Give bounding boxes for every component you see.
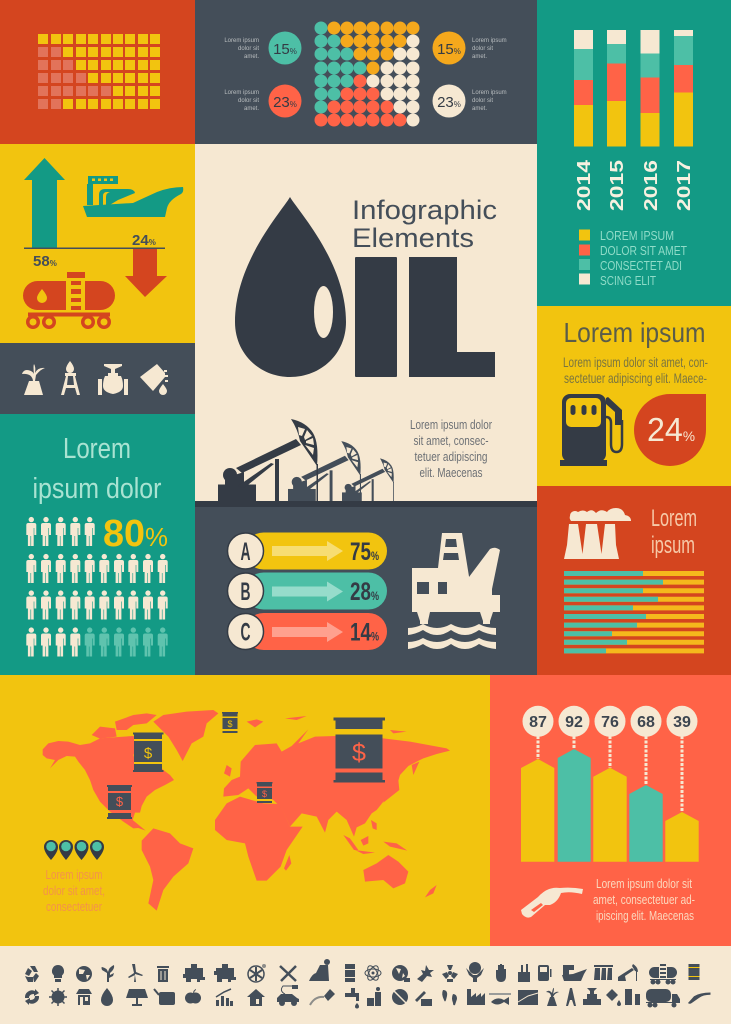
icon: pipeline valve: [98, 364, 128, 395]
icon: ship: [562, 965, 587, 981]
icon: puzzle piece: [183, 964, 205, 982]
icon: axe and stump: [415, 991, 432, 1006]
paragraph: yellow panel: [563, 354, 708, 386]
panel: dark icon strip: [0, 343, 195, 414]
horizontal stacked bars: [564, 571, 704, 653]
icon: offshore oil rig: [408, 533, 500, 649]
caption: top-left stat: dolor sit: [238, 46, 259, 52]
centre paragraph: elit. Maecenas: [420, 465, 483, 480]
caption: bottom-right stat: dolor sit: [472, 98, 493, 104]
icon: nozzle: [688, 992, 710, 1004]
icon: gusher: [546, 988, 559, 1006]
pump jacks: [218, 419, 394, 502]
barrel: Arctic: [222, 712, 238, 733]
year labels: [574, 160, 694, 211]
icon: no-globe: [392, 989, 408, 1005]
icon: rail tank car: [23, 272, 115, 329]
caption: top-right stat: Lorem ipsum: [472, 38, 507, 44]
heading: Lorem ipsum (red panel): ipsum: [651, 532, 695, 559]
icon: radiation person: [442, 965, 458, 982]
label: 24%: 24%: [132, 232, 156, 249]
icon: fuel pump: [560, 394, 622, 466]
icon: factory towers: [594, 965, 613, 980]
option bar A: [228, 532, 387, 570]
stat: 23% coral: [268, 84, 302, 118]
panel: chart coral: [490, 675, 731, 946]
Iceland and UK: [224, 719, 263, 777]
icon: globe with tag: [392, 965, 410, 982]
panel: centre dark: [195, 502, 537, 675]
year labels: 2016: [641, 160, 661, 211]
stat: 15% orange: 15%: [437, 41, 461, 58]
Arctic islands: [285, 716, 407, 733]
icon: power plant cooling towers: [564, 508, 631, 559]
stat: 23% cream: 23%: [437, 94, 461, 111]
South America: [142, 828, 193, 911]
barrel: large, Russia: [334, 718, 385, 782]
icon: hand: [496, 964, 506, 982]
Australia: [363, 855, 408, 888]
drop badge: 24%: [634, 394, 706, 466]
arrow-topped bar chart: 92: [565, 714, 583, 731]
icon: oil can: [154, 989, 175, 1005]
option bar C: [228, 613, 387, 650]
legend: LOREM IPSUM: [600, 228, 674, 243]
icon: footprints: [442, 990, 457, 1005]
icon: oil gusher: [22, 364, 45, 395]
coral paragraph: [593, 876, 695, 923]
arrow-topped bar chart: 87: [529, 714, 547, 731]
icon: sun: [49, 988, 67, 1006]
dot matrix chart: [314, 22, 420, 126]
legend: DOLOR SIT AMET: [600, 243, 687, 258]
icon: bulb: [52, 965, 64, 982]
icon: solar panel: [126, 989, 148, 1006]
icon: oil barrel: [688, 964, 700, 980]
heading: Lorem ipsum dolor: [32, 433, 162, 505]
people pictogram: [26, 517, 168, 656]
arrow-topped bar chart: 39: [673, 714, 691, 731]
Africa: [215, 797, 303, 881]
option bar B: 28%: [350, 578, 379, 606]
centre paragraph: tetuer adipiscing: [414, 449, 488, 464]
barrel: Canada: $: [144, 745, 153, 762]
baseline: [24, 248, 165, 249]
option bar B: [228, 572, 387, 610]
year labels: 2017: [674, 160, 694, 211]
legend: [579, 228, 687, 288]
icon: puzzle piece with leaf: [214, 964, 236, 982]
barrel: Mediterranean: [256, 782, 272, 803]
arrow-topped bar chart: [521, 706, 699, 862]
caption: bottom-left stat: Lorem ipsum: [224, 90, 259, 96]
caption: top-right stat: amet.: [472, 54, 487, 60]
Greenland: [153, 710, 218, 761]
caption: bottom-right stat: amet.: [472, 106, 487, 112]
Japan: [383, 762, 419, 803]
stat: 23% coral: 23%: [273, 94, 297, 111]
icon: apple: [185, 989, 201, 1004]
panel: top-centre dark: [195, 0, 537, 144]
icon: tank car: [649, 964, 677, 984]
footer icons: bottom row: [25, 985, 711, 1008]
heading: Lorem ipsum (red panel): [651, 505, 697, 559]
icon: factory: [467, 989, 485, 1005]
heading: Lorem ipsum (yellow panel): Lorem ipsum: [564, 317, 706, 348]
icon: tanker ship: [83, 176, 183, 217]
icon: wind turbine: [128, 964, 143, 982]
legend: SCING ELIT: [600, 273, 656, 288]
option bar A: A: [240, 538, 250, 566]
icon strip: [22, 361, 168, 395]
icon: toxic barrel: [345, 964, 355, 982]
year labels: 2015: [607, 160, 627, 211]
coral paragraph: ipiscing elit. Maecenas: [596, 908, 694, 923]
Eurasia: [223, 729, 450, 837]
stat: 15% teal: [268, 32, 302, 64]
heading: Lorem ipsum (red panel): Lorem: [651, 505, 697, 532]
icon: electric car: [277, 985, 299, 1006]
centre paragraph: [410, 417, 493, 480]
icon: refresh: [25, 989, 39, 1005]
ground band: [195, 501, 537, 507]
barrel: Canada: [133, 732, 164, 772]
centre paragraph: sit amet, consec-: [414, 433, 488, 448]
option bar C: C: [240, 618, 250, 646]
year labels: 2014: [574, 160, 594, 211]
icon: tanker truck: [646, 989, 680, 1008]
Indonesia and Philippines: [343, 820, 407, 854]
label: 58%: 58%: [33, 253, 57, 270]
panel: icon footer: [0, 946, 731, 1024]
drop badge: 24%: 24%: [647, 411, 695, 448]
coral paragraph: amet, consectetuer ad-: [593, 892, 695, 907]
coral paragraph: Lorem ipsum dolor sit: [596, 876, 692, 891]
stat: 23% cream: [432, 84, 466, 118]
barrel: Arctic: $: [227, 719, 233, 729]
icon: gas pump: [538, 965, 552, 981]
icon: trash can: [157, 966, 169, 982]
caption: bottom-left stat: dolor sit: [238, 98, 259, 104]
panel: left yellow: [0, 144, 195, 343]
stat: 15% orange: [432, 32, 466, 64]
map caption: Lorem ipsum: [46, 867, 102, 882]
icon: growth chart: [216, 989, 233, 1006]
icon: globe: [76, 966, 92, 982]
icon: water drop: [101, 988, 113, 1006]
Arctic Canada: [92, 713, 157, 739]
icon: pump jack: [618, 964, 638, 981]
icon: flower: [417, 965, 434, 982]
map caption: consectetuer: [46, 899, 103, 914]
icon: fuel nozzle: [521, 888, 583, 918]
panel: right teal: [537, 0, 731, 306]
caption: bottom-right stat: Lorem ipsum: [472, 90, 507, 96]
caption: top-left stat: Lorem ipsum: [224, 38, 259, 44]
centre paragraph: Lorem ipsum dolor: [410, 417, 493, 432]
barrel: Mediterranean: $: [262, 789, 267, 799]
heading: Lorem ipsum dolor: ipsum dolor: [32, 473, 162, 505]
icon: gas flare: [61, 361, 80, 395]
footer icons: top row: [25, 959, 700, 984]
icon: canister: [606, 989, 621, 1006]
panel: right red: [537, 486, 731, 675]
arrow: down red: [125, 249, 167, 297]
stat: 80%: 80%: [103, 513, 168, 555]
legend: CONSECTET ADI: [600, 258, 682, 273]
icon: fuel pumps: [625, 989, 640, 1005]
panel: map yellow: [0, 675, 490, 946]
icon: fan wheel: [248, 964, 266, 982]
caption: bottom-left stat: amet.: [244, 106, 259, 112]
world map: [43, 710, 450, 911]
barrel: Mexico: $: [116, 794, 124, 809]
title: Elements: [352, 223, 474, 253]
icon: eco house: [247, 989, 265, 1006]
panel: left teal: [0, 414, 195, 675]
barrel: large, Russia: $: [352, 739, 366, 767]
icon: dead fish: [489, 993, 511, 1005]
location pins: [44, 840, 104, 860]
waffle square chart: [38, 34, 160, 109]
icon: valve: [583, 988, 601, 1005]
icon: hands with globe: [466, 962, 484, 982]
arrow-topped bar chart: 68: [637, 714, 655, 731]
icon: nuclear plant: [309, 959, 330, 981]
title: [352, 195, 497, 253]
panel: centre cream: [195, 144, 537, 502]
icon: house: [76, 989, 92, 1005]
map caption: [43, 867, 105, 914]
caption: top-left stat: amet.: [244, 54, 259, 60]
panel: right yellow: [537, 306, 731, 486]
icon: pipeline chart: [518, 990, 538, 1005]
title: Infographic: [352, 195, 497, 225]
icon: tap: [345, 988, 359, 1008]
icon: person with bin: [367, 987, 381, 1006]
icon: oil drop: [235, 197, 346, 377]
icon: recycle: [25, 966, 39, 982]
heading: Lorem ipsum dolor: Lorem: [63, 433, 131, 465]
option bar B: B: [240, 578, 250, 606]
option bar C: 14%: [350, 618, 379, 646]
icon: plant: [102, 965, 114, 982]
title letters: IL: [355, 257, 495, 377]
caption: top-right stat: dolor sit: [472, 46, 493, 52]
arrow-topped bar chart: 76: [601, 714, 619, 731]
stacked bar chart: [574, 30, 693, 146]
icon: oil canister: [140, 364, 168, 395]
icon: watering hose: [310, 989, 335, 1005]
icon: refinery: [518, 964, 530, 982]
barrel: Mexico: [107, 785, 132, 819]
map caption: dolor sit amet,: [43, 883, 105, 898]
icon: derrick: [566, 988, 576, 1006]
arrow: up teal: [24, 158, 65, 248]
option bar A: 75%: [350, 538, 379, 566]
icon: tools: [280, 966, 296, 981]
panel: top-left red: [0, 0, 195, 144]
stat: 15% teal: 15%: [273, 41, 297, 58]
North America: [43, 736, 174, 831]
icon: atom: [365, 964, 381, 982]
New Zealand: [425, 885, 437, 897]
